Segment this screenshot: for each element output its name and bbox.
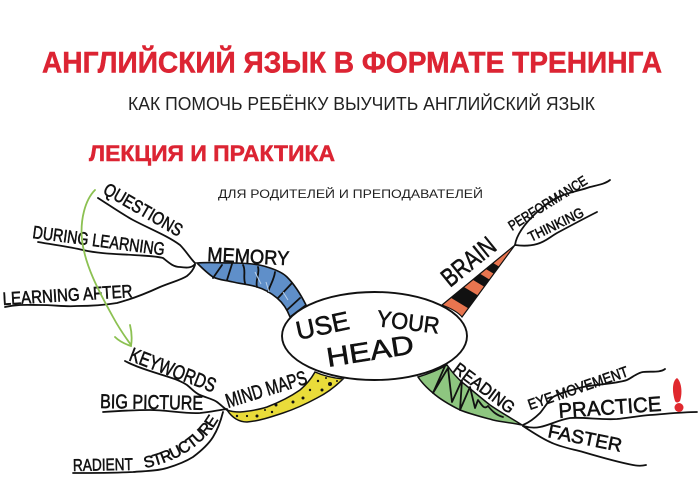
- branch: reading (green with zigzag): [418, 365, 522, 425]
- sub-branch: questions: QUESTIONS: [100, 179, 186, 240]
- branch: brain (orange with black bands): [442, 245, 515, 317]
- heading: lecture and practice: ЛЕКЦИЯ И ПРАКТИКА: [89, 141, 335, 166]
- branch: memory (blue): [197, 263, 306, 317]
- central ellipse: use your head: YOUR: [375, 305, 441, 339]
- sub-branch: learning after: LEARNING AFTER: [2, 281, 133, 309]
- label: mind maps: MIND MAPS: [223, 367, 310, 413]
- label: memory: MEMORY: [207, 244, 290, 270]
- sub-branch: radient structure: RADIENT: [73, 455, 133, 475]
- sub-branch: practice: PRACTICE: [558, 393, 662, 423]
- branch: mind maps (yellow with dots): [227, 372, 343, 422]
- sub-branch: radient structure: STRUCTURE: [144, 414, 219, 468]
- title: АНГЛИЙСКИЙ ЯЗЫК В ФОРМАТЕ ТРЕНИНГА: [42, 46, 662, 80]
- label: reading: READING: [450, 359, 519, 418]
- sub-branch: performance: PERFORMANCE: [505, 172, 590, 234]
- central ellipse: use your head: [282, 292, 467, 380]
- central ellipse: use your head: HEAD: [324, 330, 416, 373]
- subtitle: КАК ПОМОЧЬ РЕБЁНКУ ВЫУЧИТЬ АНГЛИЙСКИЙ ЯЗЫК: [128, 93, 595, 114]
- sub-branch: eye movement: EYE MOVEMENT: [526, 364, 631, 414]
- audience note: ДЛЯ РОДИТЕЛЕЙ И ПРЕПОДАВАТЕЛЕЙ: [218, 186, 483, 201]
- label: brain: BRAIN: [435, 230, 502, 293]
- sub-branch: faster: [523, 421, 646, 466]
- sub-branch: learning after: [2, 265, 195, 309]
- sub-branch: thinking: THINKING: [525, 204, 586, 245]
- central ellipse: use your head: USE: [293, 305, 352, 346]
- icon: red exclamation mark: [673, 378, 684, 412]
- sub-branch: radient structure: [72, 411, 224, 475]
- sub-branch: during learning: DURING LEARNING: [31, 222, 166, 259]
- arrow: green link from questions to keywords: [82, 190, 132, 346]
- sub-branch: faster: FASTER: [546, 421, 624, 457]
- sub-branch: keywords: KEYWORDS: [126, 344, 219, 397]
- sub-branch: practice: [523, 393, 697, 428]
- sub-branch: eye movement: [523, 364, 665, 425]
- sub-branch: big picture: BIG PICTURE: [100, 391, 203, 415]
